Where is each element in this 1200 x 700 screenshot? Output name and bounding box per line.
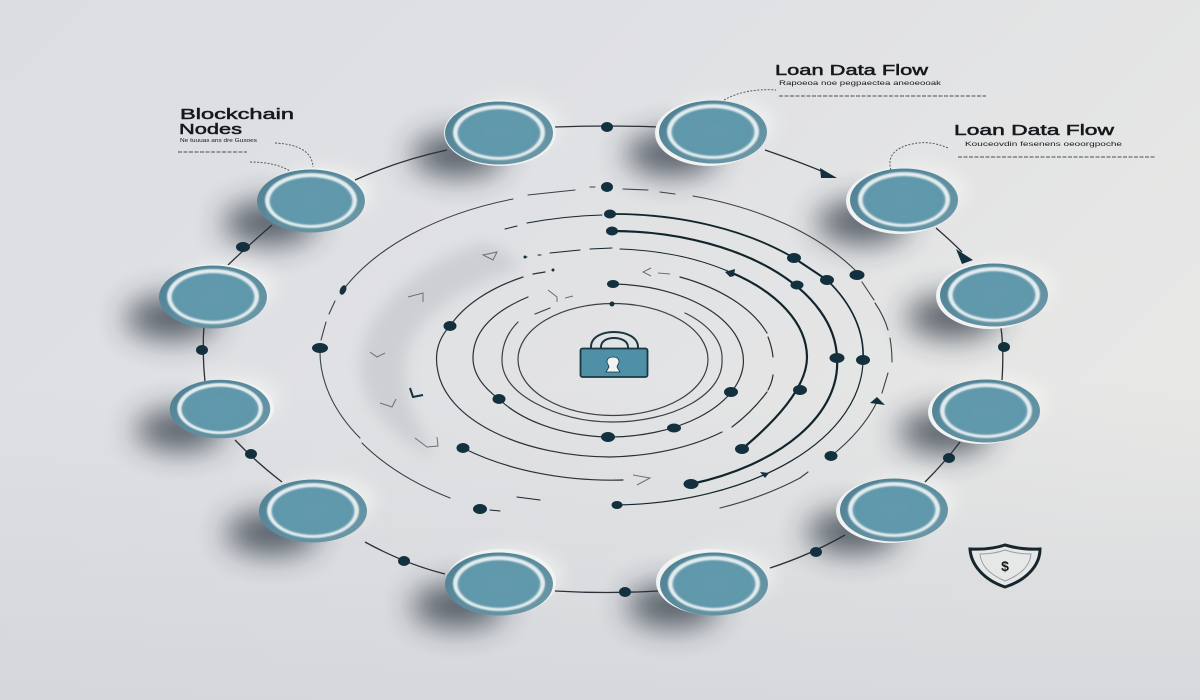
ring E <box>436 272 773 457</box>
ring F lower left <box>463 448 623 480</box>
description: Ne tuuuas ans dre Gusoes <box>180 138 257 144</box>
node: right lower <box>928 380 1040 444</box>
node: upper left <box>257 168 366 232</box>
callout leader line <box>890 143 948 170</box>
node: bottom right centre <box>656 549 768 616</box>
ring H <box>502 308 722 422</box>
label: Loan Data Flow right <box>890 122 1155 170</box>
label: Blockchain Nodes <box>178 106 313 171</box>
node: upper right <box>846 168 958 234</box>
node: bottom left centre <box>445 549 556 616</box>
outer ring connectors between nodes <box>203 126 1003 592</box>
heading: Nodes <box>179 121 242 138</box>
grey swoosh band <box>360 243 520 458</box>
node: left lower <box>170 379 274 438</box>
ring C <box>612 231 837 484</box>
node shadows <box>126 133 999 627</box>
callout leader lines <box>250 143 313 171</box>
ring arrowheads <box>725 269 885 478</box>
node: right upper <box>936 263 1048 329</box>
description: Kouceovdin fesenens oeoorgpoche <box>965 142 1123 148</box>
ring B <box>490 214 863 511</box>
concentric data rings <box>320 187 892 511</box>
ring I <box>518 304 708 416</box>
dashed rule <box>779 95 986 97</box>
node: lower left <box>259 479 367 542</box>
connector dots <box>196 122 1010 597</box>
heading: Loan Data Flow <box>775 62 928 79</box>
icon: dollar shield <box>970 545 1040 587</box>
icon: padlock <box>580 332 648 377</box>
dashed rule <box>958 156 1155 158</box>
small chevrons <box>370 252 670 485</box>
dashed rule <box>178 151 247 153</box>
label: Loan Data Flow top <box>724 62 986 100</box>
node: lower right <box>836 478 948 543</box>
ring A outermost <box>320 187 892 508</box>
ring dots <box>312 182 870 514</box>
arrowheads on outer ring <box>820 168 973 264</box>
node: top right centre <box>655 100 767 166</box>
callout leader line <box>724 90 776 100</box>
node: left upper <box>159 264 268 328</box>
ring G <box>473 284 743 437</box>
node highlights <box>176 97 1056 600</box>
heading: Loan Data Flow <box>954 122 1114 139</box>
description: Rapoeoa noe pegpaectea aneoeooak <box>779 81 943 87</box>
heading: Blockchain <box>180 106 294 123</box>
ring D <box>525 248 807 449</box>
icon: dollar shield: $ <box>1001 558 1009 574</box>
node: top left centre <box>444 100 556 166</box>
